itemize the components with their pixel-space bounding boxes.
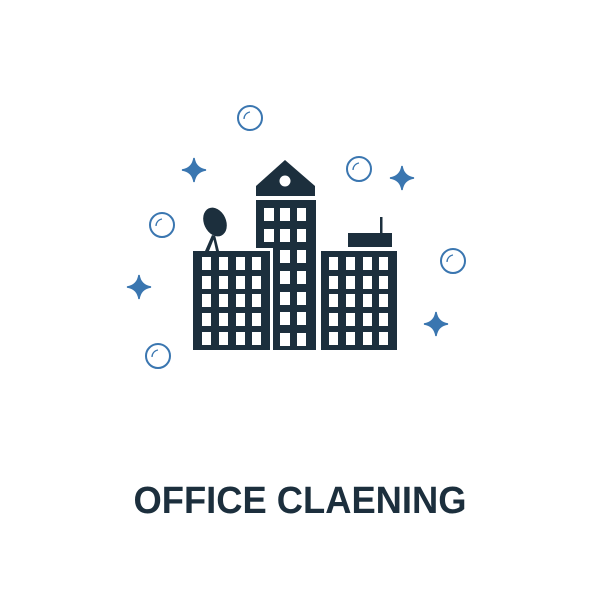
left building with dish [190, 204, 273, 352]
icon: bubbles [146, 106, 465, 368]
icon: sparkles [127, 158, 448, 336]
title: OFFICE CLAENING [134, 480, 466, 522]
right building with antenna [321, 217, 397, 350]
center tower [256, 160, 316, 350]
icon: office buildings [190, 160, 397, 352]
